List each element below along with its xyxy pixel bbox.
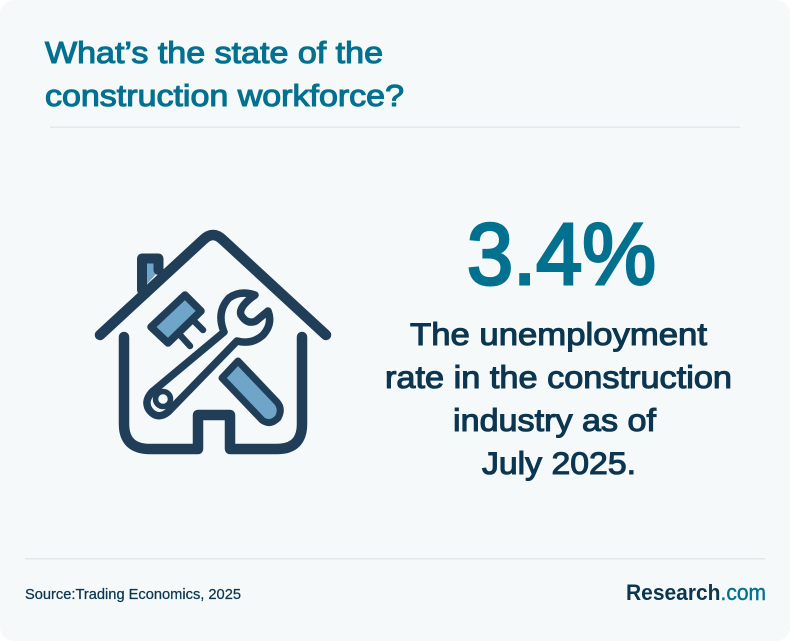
icon: walls and door	[124, 337, 302, 449]
description text: industry as of	[453, 402, 656, 438]
description text	[385, 316, 732, 481]
icon: wrench hole	[156, 392, 170, 406]
icon: chimney	[142, 258, 158, 290]
title	[45, 35, 404, 113]
logo: Research.com: Research.com	[626, 580, 766, 605]
description text: The unemployment	[410, 316, 707, 352]
icon: house with wrench and hammer	[100, 235, 326, 449]
icon: wrench	[147, 293, 270, 416]
description text: July 2025.	[482, 445, 636, 481]
title: construction workforce?	[45, 78, 404, 113]
icon: hammer head	[151, 295, 203, 346]
source note: Source:Trading Economics, 2025	[25, 587, 241, 603]
title: What’s the state of the	[45, 35, 383, 70]
icon: hammer handle	[222, 361, 280, 423]
description text: rate in the construction	[385, 359, 732, 395]
icon: roof	[100, 235, 326, 335]
big number: 3.4%	[467, 206, 656, 303]
